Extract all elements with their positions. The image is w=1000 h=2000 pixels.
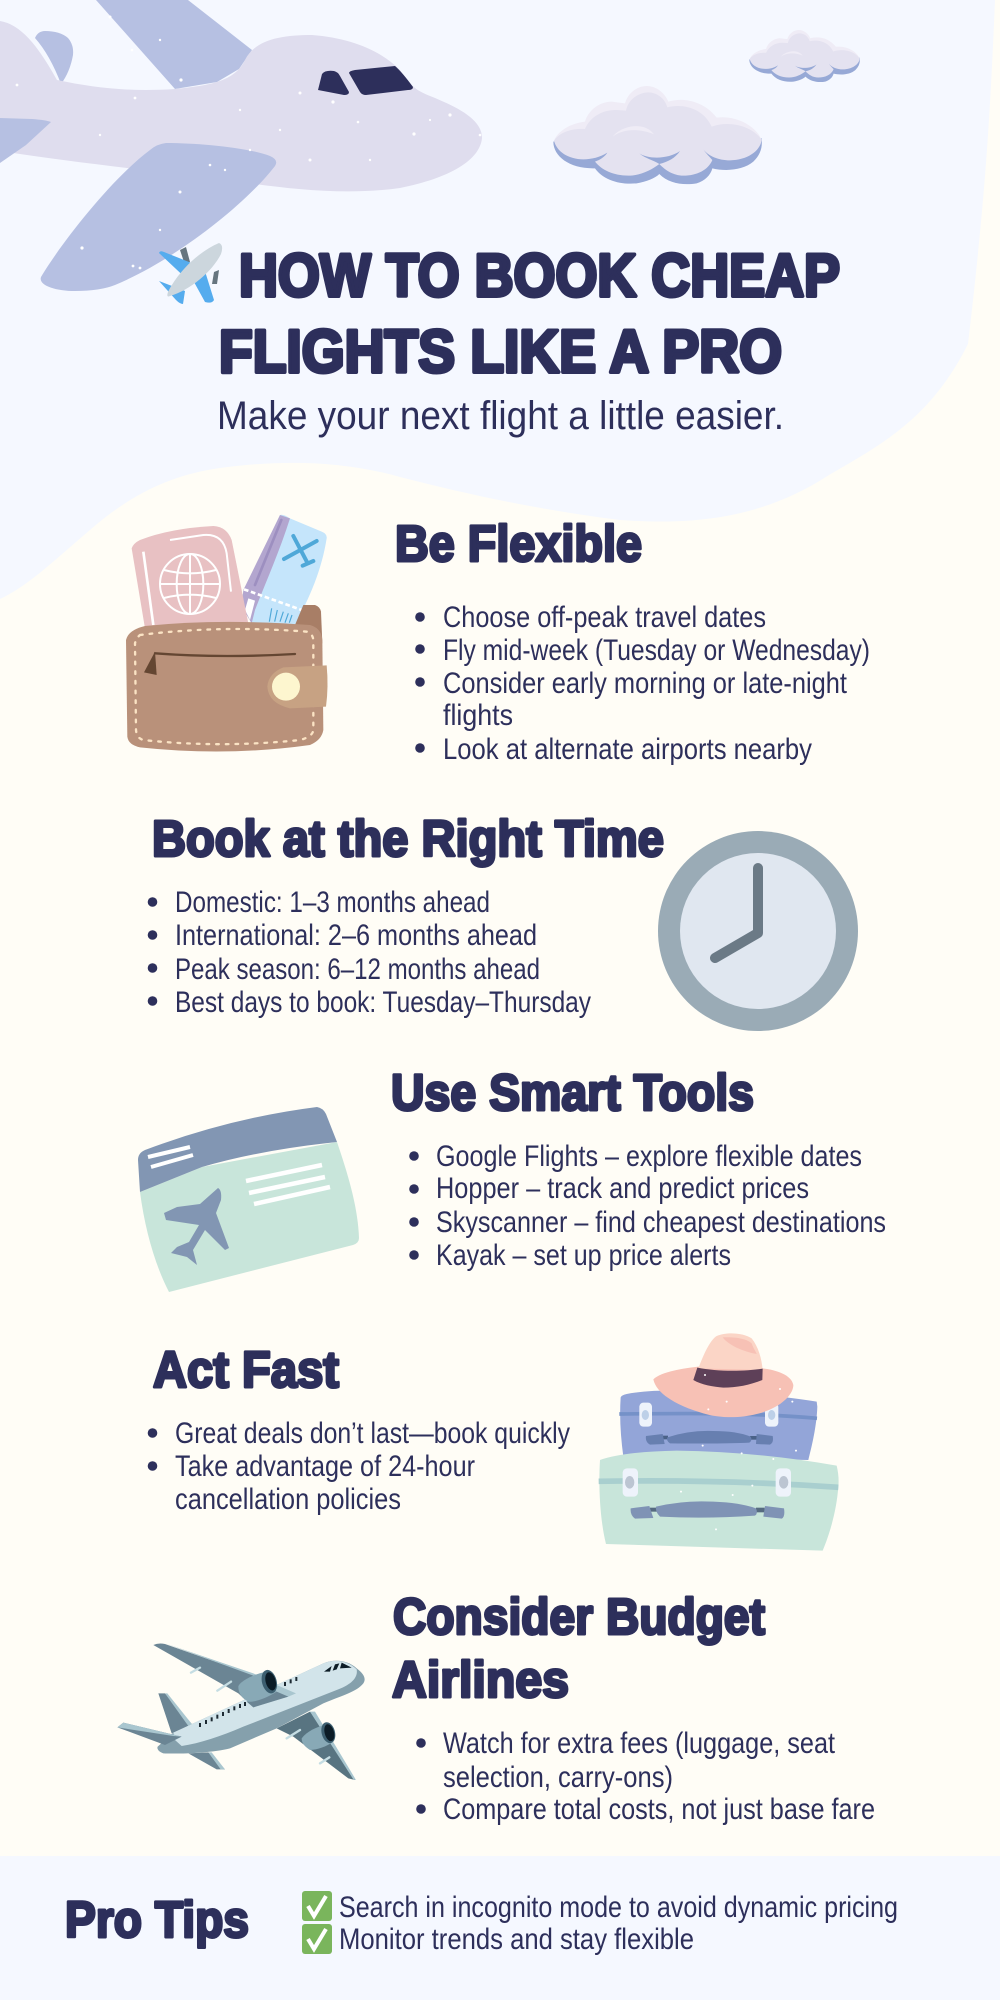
bullet list: Choose off-peak travel dates xyxy=(443,601,766,634)
heading: Act Fast xyxy=(153,1341,339,1398)
bullet list xyxy=(148,1417,570,1516)
icon: check mark 1 xyxy=(302,1891,332,1921)
title: HOW TO BOOK CHEAP xyxy=(239,242,840,309)
heading: Airlines xyxy=(392,1651,569,1708)
bullet list xyxy=(148,886,591,1019)
heading: Pro Tips xyxy=(65,1891,249,1948)
illustration: boarding pass xyxy=(138,1107,359,1292)
bullet list: International: 2–6 months ahead xyxy=(175,919,537,952)
bullet list: Watch for extra fees (luggage, seat xyxy=(443,1727,836,1760)
bullet list: flights xyxy=(443,699,513,732)
bullet list: Consider early morning or late-night xyxy=(443,667,848,700)
icon: airplane emoji xyxy=(159,243,222,304)
bullet list: Kayak – set up price alerts xyxy=(436,1239,731,1272)
heading: Use Smart Tools xyxy=(391,1064,754,1121)
panel: pro tips xyxy=(0,1856,1000,2000)
panel: consider budget airlines xyxy=(117,1588,875,1826)
tip text 1: Search in incognito mode to avoid dynamic pricing xyxy=(339,1891,898,1924)
illustration: large cloud xyxy=(553,86,762,184)
illustration: small cloud xyxy=(749,30,860,82)
heading: Consider Budget xyxy=(393,1588,765,1645)
bullet list: Skyscanner – find cheapest destinations xyxy=(436,1206,886,1239)
bullet list xyxy=(415,601,870,766)
illustration: suitcases and hat xyxy=(599,1333,839,1551)
bullet list: Google Flights – explore flexible dates xyxy=(436,1140,862,1173)
illustration: jet airplane xyxy=(117,1643,365,1780)
header background blob xyxy=(0,0,995,599)
bullet list: selection, carry-ons) xyxy=(443,1761,673,1794)
title: FLIGHTS LIKE A PRO xyxy=(219,318,782,385)
bullet list: Compare total costs, not just base fare xyxy=(443,1793,875,1826)
illustration: large airplane xyxy=(0,0,482,291)
illustration: wallet with passport and ticket xyxy=(126,515,328,751)
bullet list xyxy=(416,1727,875,1826)
bullet list xyxy=(409,1140,886,1272)
panel: act fast xyxy=(148,1333,839,1551)
bullet list: Domestic: 1–3 months ahead xyxy=(175,886,490,919)
bullet list: Fly mid-week (Tuesday or Wednesday) xyxy=(443,634,870,667)
heading: Be Flexible xyxy=(395,515,642,572)
heading: Book at the Right Time xyxy=(152,810,664,867)
bullet list: Look at alternate airports nearby xyxy=(443,733,812,766)
bullet list: Great deals don’t last—book quickly xyxy=(175,1417,570,1450)
icon: check mark 2 xyxy=(302,1924,332,1954)
tip text 2: Monitor trends and stay flexible xyxy=(339,1923,694,1956)
panel: be flexible xyxy=(126,515,870,766)
bullet list: Take advantage of 24-hour xyxy=(175,1450,475,1483)
icon: clock xyxy=(658,831,858,1031)
title xyxy=(219,242,840,385)
bullet list: Hopper – track and predict prices xyxy=(436,1172,809,1205)
bullet list: Best days to book: Tuesday–Thursday xyxy=(175,986,591,1019)
bullet list: cancellation policies xyxy=(175,1483,401,1516)
heading xyxy=(392,1588,765,1708)
panel: book at the right time xyxy=(148,810,858,1031)
bullet list: Peak season: 6–12 months ahead xyxy=(175,953,540,986)
panel: use smart tools xyxy=(138,1064,886,1292)
subtitle: Make your next flight a little easier. xyxy=(217,394,784,438)
